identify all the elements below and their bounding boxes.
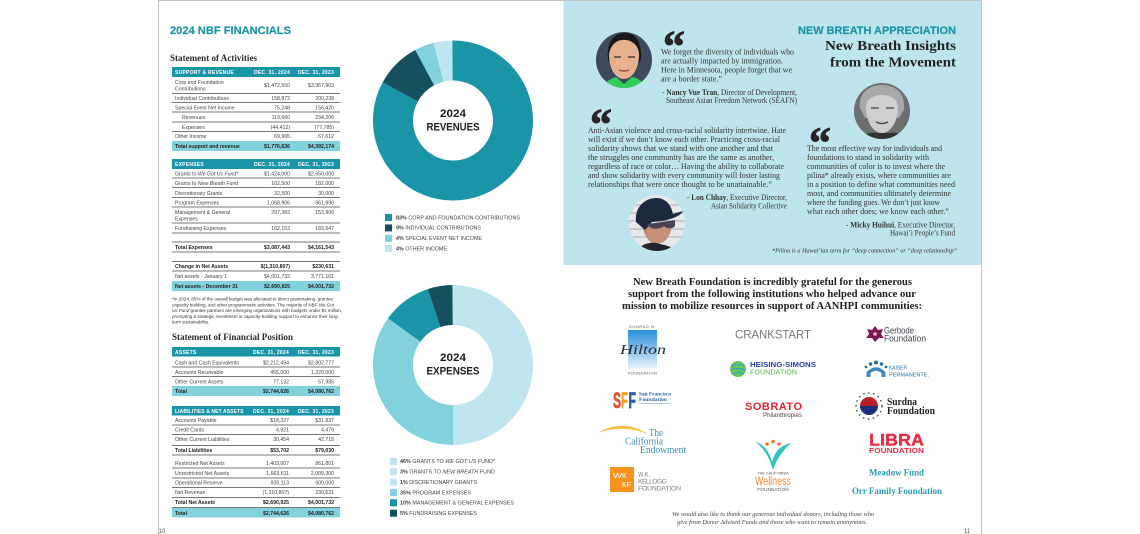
legend: revenues: 4% OTHER INCOME (396, 246, 447, 252)
table: assets: 1,220,000 (311, 370, 334, 376)
table: liabilities and net assets: LIABILITIES & NET ASSETS (175, 409, 244, 415)
photo: Nancy Vue Tran (596, 32, 652, 90)
table: support and revenue (172, 67, 340, 151)
table: assets: 455,000 (270, 370, 289, 376)
table: expenses (172, 159, 340, 291)
table: liabilities and net assets (172, 406, 340, 518)
table: expenses: $4,001,732 (264, 274, 290, 280)
legend: expenses: 3% GRANTS TO NEW BREATH FUND (400, 470, 495, 476)
legend: revenues (385, 214, 520, 252)
table: assets: Other Current Assets (175, 380, 224, 386)
heading: new breath insights from the movement: from the Movement (830, 56, 956, 70)
table: liabilities and net assets: $4,080,762 (308, 511, 334, 517)
table: liabilities and net assets: Total (175, 511, 188, 517)
table: support and revenue: 200,238 (315, 96, 334, 102)
heading: statement of activities: Statement of Activities (170, 53, 257, 63)
text block: quote 1: are a border state.” (661, 74, 722, 84)
table: liabilities and net assets: (1,310,807) (262, 490, 289, 496)
table: support and revenue: 234,206 (315, 115, 334, 121)
logo: The California Endowment: The (649, 428, 664, 439)
footnote: budget allocation: Us Fund grantee partners are emerging organizations with budgets under $1 million, (172, 308, 342, 313)
table: liabilities and net assets: 1,663,611 (266, 471, 289, 477)
logo: Conrad N. Hilton Foundation: FOUNDATION (628, 370, 657, 376)
table: support and revenue: DEC. 31, 2024 (254, 70, 290, 76)
text block: quote 2: regardless of race or color… Having the ability to collaborate (588, 162, 784, 171)
table: expenses: 32,500 (274, 191, 290, 197)
logo: Gerbode Foundation: Gerbode (884, 326, 914, 336)
table: liabilities and net assets: $2,690,925 (263, 500, 289, 506)
logo: Sobrato Philanthropies: Philanthropies (763, 412, 803, 419)
table: assets: DEC. 31, 2024 (253, 350, 289, 356)
logo: Conrad N. Hilton Foundation (619, 324, 666, 376)
table: assets: 77,132 (273, 380, 289, 386)
logo: Conrad N. Hilton Foundation: Hilton (619, 343, 666, 358)
text block: quote 2: the struggles one community has are the same as another, (588, 153, 774, 162)
text block: quote 3: communities of color is to invest where the (807, 162, 945, 171)
logo: San Francisco Foundation (613, 388, 672, 413)
footnote: budget allocation: capacity building, and other programmatic activities. The majority of NBF We Got (172, 302, 335, 307)
text block: quote 2: will exist if we don’t know each other. Practicing cross-racial (588, 135, 781, 144)
logo: Kaiser Permanente (865, 360, 929, 378)
text block: quote 3: Hawai’i People’s Fund (890, 228, 955, 238)
logo: W.K. Kellogg Foundation: W (613, 473, 623, 480)
logo: The California Wellness Foundation: FOUNDATION (757, 487, 789, 493)
table: assets: $2,744,626 (263, 389, 289, 395)
table: support and revenue: 156,420 (315, 105, 334, 111)
table: liabilities and net assets: $2,744,626 (263, 511, 289, 517)
table: support and revenue: SUPPORT & REVENUE (175, 70, 234, 76)
table: assets: $2,802,777 (308, 360, 334, 366)
table: liabilities and net assets: Other Current Liabilities (175, 437, 230, 443)
text block: gratitude statement: support from the following institutions who helped advance our (628, 289, 916, 300)
table: support and revenue: 158,872 (271, 96, 290, 102)
table: expenses: 30,000 (318, 191, 334, 197)
legend: revenues: 83% CORP AND FOUNDATION CONTRIBUTIONS (396, 215, 520, 221)
text block: quote 2: - Lon Chhay, Executive Director, (687, 193, 787, 202)
legend: revenues: 9% INDIVIDUAL CONTRIBUTIONS (396, 226, 481, 232)
logo: The California Wellness Foundation (755, 440, 791, 493)
text block: quote 2: solidarity shows that we stand with one another and that (588, 144, 774, 153)
table: assets (172, 347, 340, 396)
logo: Kaiser Permanente: KAISER (889, 366, 907, 372)
text block: quote 3: what each other does; we know each other.” (807, 207, 949, 216)
table: support and revenue: Total support and revenue (175, 144, 240, 150)
logo: Heising-Simons Foundation: HEISING-SIMONS (750, 360, 816, 369)
table: liabilities and net assets: 42,715 (318, 437, 334, 443)
logo: Meadow Fund: Meadow Fund (869, 468, 924, 478)
table: expenses: Change in Net Assets (175, 264, 228, 270)
text block: quote 2: Asian Solidarity Collective (711, 202, 787, 210)
logo: W.K. Kellogg Foundation: KF (622, 482, 631, 489)
table: expenses: 102,500 (271, 181, 290, 187)
text block: quote 3: in a position to define what communities need (807, 180, 955, 189)
table: expenses: 183,647 (315, 226, 334, 232)
logo: Conrad N. Hilton Foundation: CONRAD N. (629, 324, 656, 329)
legend: revenues: 4% SPECIAL EVENT NET INCOME (396, 236, 482, 242)
table: expenses: EXPENSES (175, 162, 204, 168)
text block: individual donor thanks (672, 511, 875, 526)
chart: 2024 expenses donut: 2024 (440, 352, 467, 364)
table: liabilities and net assets: Credit Cards (175, 428, 205, 434)
icon: quote mark 3: “ (809, 118, 831, 168)
table: support and revenue: Contributions (175, 86, 206, 92)
table: liabilities and net assets: 1,403,007 (266, 461, 289, 467)
text block: quote 1 (661, 48, 797, 105)
text block: quote 2: relationships that were once thought to be unattainable.” (588, 180, 772, 189)
table: support and revenue: $1,776,636 (264, 144, 290, 150)
logo: W.K. Kellogg Foundation: K (622, 473, 627, 480)
table: support and revenue: Special Event Net Income (175, 105, 235, 111)
table: expenses: Expenses (175, 216, 198, 222)
text block: quote 3: foundations to stand in solidarity with (807, 153, 929, 162)
text block: gratitude statement: New Breath Foundation is incredibly grateful for the generous (633, 277, 912, 288)
text block: quote 1: - Nancy Vue Tran, Director of Development, (662, 88, 797, 97)
logo: Kaiser Permanente: PERMANENTE. (889, 372, 929, 378)
text block: quote 1: We forget the diversity of individuals who (661, 48, 794, 56)
table: assets: Cash and Cash Equivalents (175, 360, 239, 366)
table: liabilities and net assets: 4,921 (276, 428, 289, 434)
logo: The California Endowment: California (625, 436, 664, 448)
table: liabilities and net assets: $18,327 (270, 418, 289, 424)
table: liabilities and net assets: Total Net Assets (175, 500, 215, 506)
table: expenses: Total Expenses (175, 245, 213, 251)
table: support and revenue: DEC. 31, 2023 (298, 70, 334, 76)
table: expenses: Grants to We Got Us Fund* (175, 171, 238, 177)
legend: expenses: 10% MANAGEMENT & GENERAL EXPENSES (400, 501, 514, 507)
table: support and revenue: 69,965 (274, 134, 290, 140)
table: expenses: $3,087,443 (264, 245, 290, 251)
table: liabilities and net assets: Unrestricted Net Assets (175, 471, 230, 477)
chart: 2024 revenues donut: 2024 (440, 108, 467, 120)
logo: The California Endowment: Endowment (640, 445, 686, 456)
table: expenses: 1,068,906 (267, 200, 290, 206)
table: expenses: $2,690,925 (264, 284, 290, 290)
table: assets: $4,080,762 (308, 389, 334, 395)
photo: Lon Chhay (629, 195, 685, 252)
logo: W.K. Kellogg Foundation: W.K. (638, 472, 650, 478)
text block: quote 3: The most effective way for individuals and (807, 144, 942, 153)
table: assets: $2,212,494 (263, 360, 289, 366)
text block: individual donor thanks: give from Donor Advised Funds and those who want to remain anonymous. (677, 519, 867, 526)
table: expenses: $1,424,000 (264, 171, 290, 177)
table: expenses: Grants to New Breath Fund (175, 181, 238, 187)
table: support and revenue: $1,472,550 (264, 83, 290, 89)
table: expenses: Management & General (175, 210, 230, 216)
table: liabilities and net assets: 2,009,300 (311, 471, 334, 477)
legend: expenses: 5% FUNDRAISING EXPENSES (400, 511, 477, 517)
table: support and revenue: Corp and Foundation (175, 80, 224, 86)
table: expenses: $2,650,000 (308, 171, 334, 177)
table: assets: Accounts Receivable (175, 370, 224, 376)
table: liabilities and net assets: 861,801 (315, 461, 334, 467)
logo: Crankstart: CRANKSTART (735, 330, 811, 342)
panel: page outline (158, 0, 982, 534)
text block: quote 3 (807, 144, 955, 238)
logo: Orr Family Foundation: Orr Family Foundation (852, 486, 942, 496)
chart: 2024 revenues donut (393, 60, 513, 180)
photo: Micky Huihui (854, 83, 910, 140)
table: expenses: 3,771,101 (311, 274, 334, 280)
table: support and revenue: 119,660 (272, 115, 290, 121)
logo: Sobrato Philanthropies (745, 401, 803, 419)
text block: quote 3: where the funding goes. We don’t just know (807, 198, 940, 207)
table: liabilities and net assets: $31,837 (315, 418, 334, 424)
heading: new breath appreciation: NEW BREATH APPRECIATION (798, 25, 956, 37)
icon: quote mark 2: “ (590, 100, 612, 149)
table: expenses: 162,153 (271, 226, 290, 232)
text block: quote 1: Southeast Asian Freedom Network (SEAFN) (666, 96, 797, 105)
table: expenses: 297,383 (271, 210, 290, 216)
table: support and revenue: Individual Contributions (175, 96, 229, 102)
chart: 2024 expenses donut: EXPENSES (426, 366, 480, 378)
table: liabilities and net assets: Net Revenue (175, 490, 205, 496)
heading: statement of financial position: Statement of Financial Position (172, 332, 293, 342)
table: support and revenue: Expenses (182, 125, 205, 131)
table: assets: ASSETS (175, 350, 197, 356)
table: liabilities and net assets: DEC. 31, 2024 (253, 409, 289, 415)
panel: new breath appreciation background (564, 1, 981, 265)
table: liabilities and net assets: DEC. 31, 2023 (298, 409, 334, 415)
logo: W.K. Kellogg Foundation: FOUNDATION (638, 486, 681, 492)
table: support and revenue: 75,248 (274, 105, 290, 111)
table: liabilities and net assets: $4,001,732 (308, 500, 334, 506)
table: liabilities and net assets: 900,000 (315, 480, 334, 486)
table: expenses: Program Expenses (175, 200, 220, 206)
footnote: budget allocation: term sustainability. (172, 320, 209, 324)
footnote: budget allocation: prompting a strategic investment in capacity-building support to enhance their long- (172, 314, 340, 319)
table: expenses: DEC. 31, 2023 (298, 162, 334, 168)
table: liabilities and net assets: Restricted Net Assets (175, 461, 225, 467)
logo: San Francisco Foundation: F (621, 388, 628, 413)
table: support and revenue: (77,785) (315, 125, 334, 131)
table: liabilities and net assets: 4,479 (321, 428, 334, 434)
title: 2024 NBF FINANCIALS (170, 25, 292, 37)
table: assets: 57,985 (318, 380, 334, 386)
text block: quote 2 (588, 126, 787, 210)
table: liabilities and net assets: Total Liabilities (175, 448, 212, 454)
table: support and revenue: Other Income (175, 134, 207, 140)
logo: W.K. Kellogg Foundation (610, 467, 681, 492)
text block: quote 1: Here in Minnesota, people forget that we (661, 66, 792, 74)
table: expenses: 961,990 (315, 200, 334, 206)
text block: quote 1: are actually impacted by immigration. (661, 56, 783, 66)
table: support and revenue: $3,967,903 (308, 83, 334, 89)
text block: quote 3: most, and communities ultimately determine (807, 189, 951, 198)
table: support and revenue: $4,392,174 (308, 144, 334, 150)
logo: The California Wellness Foundation: THE CALIFORNIA (757, 472, 789, 476)
chart: 2024 revenues donut: REVENUES (426, 121, 480, 133)
table: expenses: 182,000 (315, 181, 334, 187)
table: liabilities and net assets: 935,113 (271, 480, 289, 486)
table: expenses: Discretionary Grants (175, 191, 223, 197)
text block: quote 2: and show solidarity with every community will foster lasting (588, 171, 780, 180)
logo: Libra Foundation: LIBRA (869, 430, 924, 450)
heading: new breath insights from the movement (825, 39, 957, 70)
table: expenses: $(1,310,807) (261, 264, 290, 270)
logo: Surdna Foundation: Surdna (887, 397, 917, 408)
table: liabilities and net assets: 230,631 (315, 490, 334, 496)
logo: Surdna Foundation (856, 393, 935, 419)
heading: new breath insights from the movement: New Breath Insights (825, 39, 957, 54)
logo: The California Endowment (598, 426, 686, 456)
table: expenses: $230,631 (312, 264, 334, 270)
table: expenses: Fundraising Expenses (175, 226, 227, 232)
table: expenses: Net assets - January 1 (175, 274, 227, 280)
footnote: budget allocation (172, 296, 342, 324)
footnote: budget allocation: *In 2024, 85% of the overall budget was allocated to direct grantmaking, grantee (172, 296, 334, 302)
table: expenses: $4,161,543 (308, 245, 334, 251)
table: expenses: $4,001,732 (308, 284, 334, 290)
logo: Heising-Simons Foundation (730, 360, 816, 377)
table: expenses: Net assets - December 31 (175, 284, 238, 290)
table: expenses: DEC. 31, 2024 (254, 162, 290, 168)
logo: Surdna Foundation: Foundation (887, 406, 935, 417)
logo: Heising-Simons Foundation: FOUNDATION (750, 368, 797, 376)
legend: expenses: 35% PROGRAM EXPENSES (400, 490, 471, 496)
table: liabilities and net assets: $79,030 (315, 448, 334, 454)
logo: Libra Foundation: FOUNDATION (869, 448, 924, 455)
logo: Gerbode Foundation (866, 326, 926, 344)
table: support and revenue: 67,612 (318, 134, 334, 140)
text block: quote 3: - Micky Huihui, Executive Director, (846, 220, 955, 230)
table: expenses: 153,906 (315, 210, 334, 216)
logo: W.K. Kellogg Foundation: KELLOGG (638, 478, 667, 486)
text block: gratitude statement: mission to mobilize resources in support of AANHPI communities: (622, 301, 922, 312)
icon: quote mark 1: “ (663, 22, 685, 71)
logo: The California Wellness Foundation: Wellness (755, 476, 791, 488)
text block: quote 2: Anti-Asian violence and cross-racial solidarity intertwine. Hate (588, 126, 786, 135)
table: support and revenue: (44,412) (271, 125, 290, 131)
legend: expenses: 1% DISCRETIONARY GRANTS (400, 480, 477, 486)
chart: 2024 expenses donut (393, 305, 513, 425)
logo: Sobrato Philanthropies: SOBRATO (745, 401, 802, 413)
table: support and revenue: Revenues (182, 115, 206, 121)
text block: gratitude statement (622, 277, 922, 312)
table: liabilities and net assets: Operational Reserve (175, 480, 223, 486)
table: liabilities and net assets: 30,454 (273, 437, 289, 443)
text: pilina footnote: *Pilina is a Hawai’ian term for “deep connection” or “deep relationship” (772, 248, 957, 254)
logo: San Francisco Foundation: F (628, 388, 636, 413)
logo: San Francisco Foundation: S (613, 388, 621, 413)
table: liabilities and net assets: Accounts Payable (175, 418, 217, 424)
logo: Gerbode Foundation: Foundation (884, 334, 926, 344)
logo: San Francisco Foundation: San Francisco (639, 392, 672, 398)
text block: individual donor thanks: We would also like to thank our generous individual donors, including those who (672, 511, 875, 518)
table: assets: Total (175, 389, 188, 395)
table: assets: DEC. 31, 2023 (298, 350, 334, 356)
text block: quote 3: pilina* already exists, where communities are (807, 171, 951, 180)
legend: expenses (390, 458, 514, 517)
logo: San Francisco Foundation: Foundation (639, 398, 667, 403)
table: liabilities and net assets: $53,702 (270, 448, 289, 454)
legend: expenses: 46% GRANTS TO WE GOT US FUND* (400, 459, 496, 465)
